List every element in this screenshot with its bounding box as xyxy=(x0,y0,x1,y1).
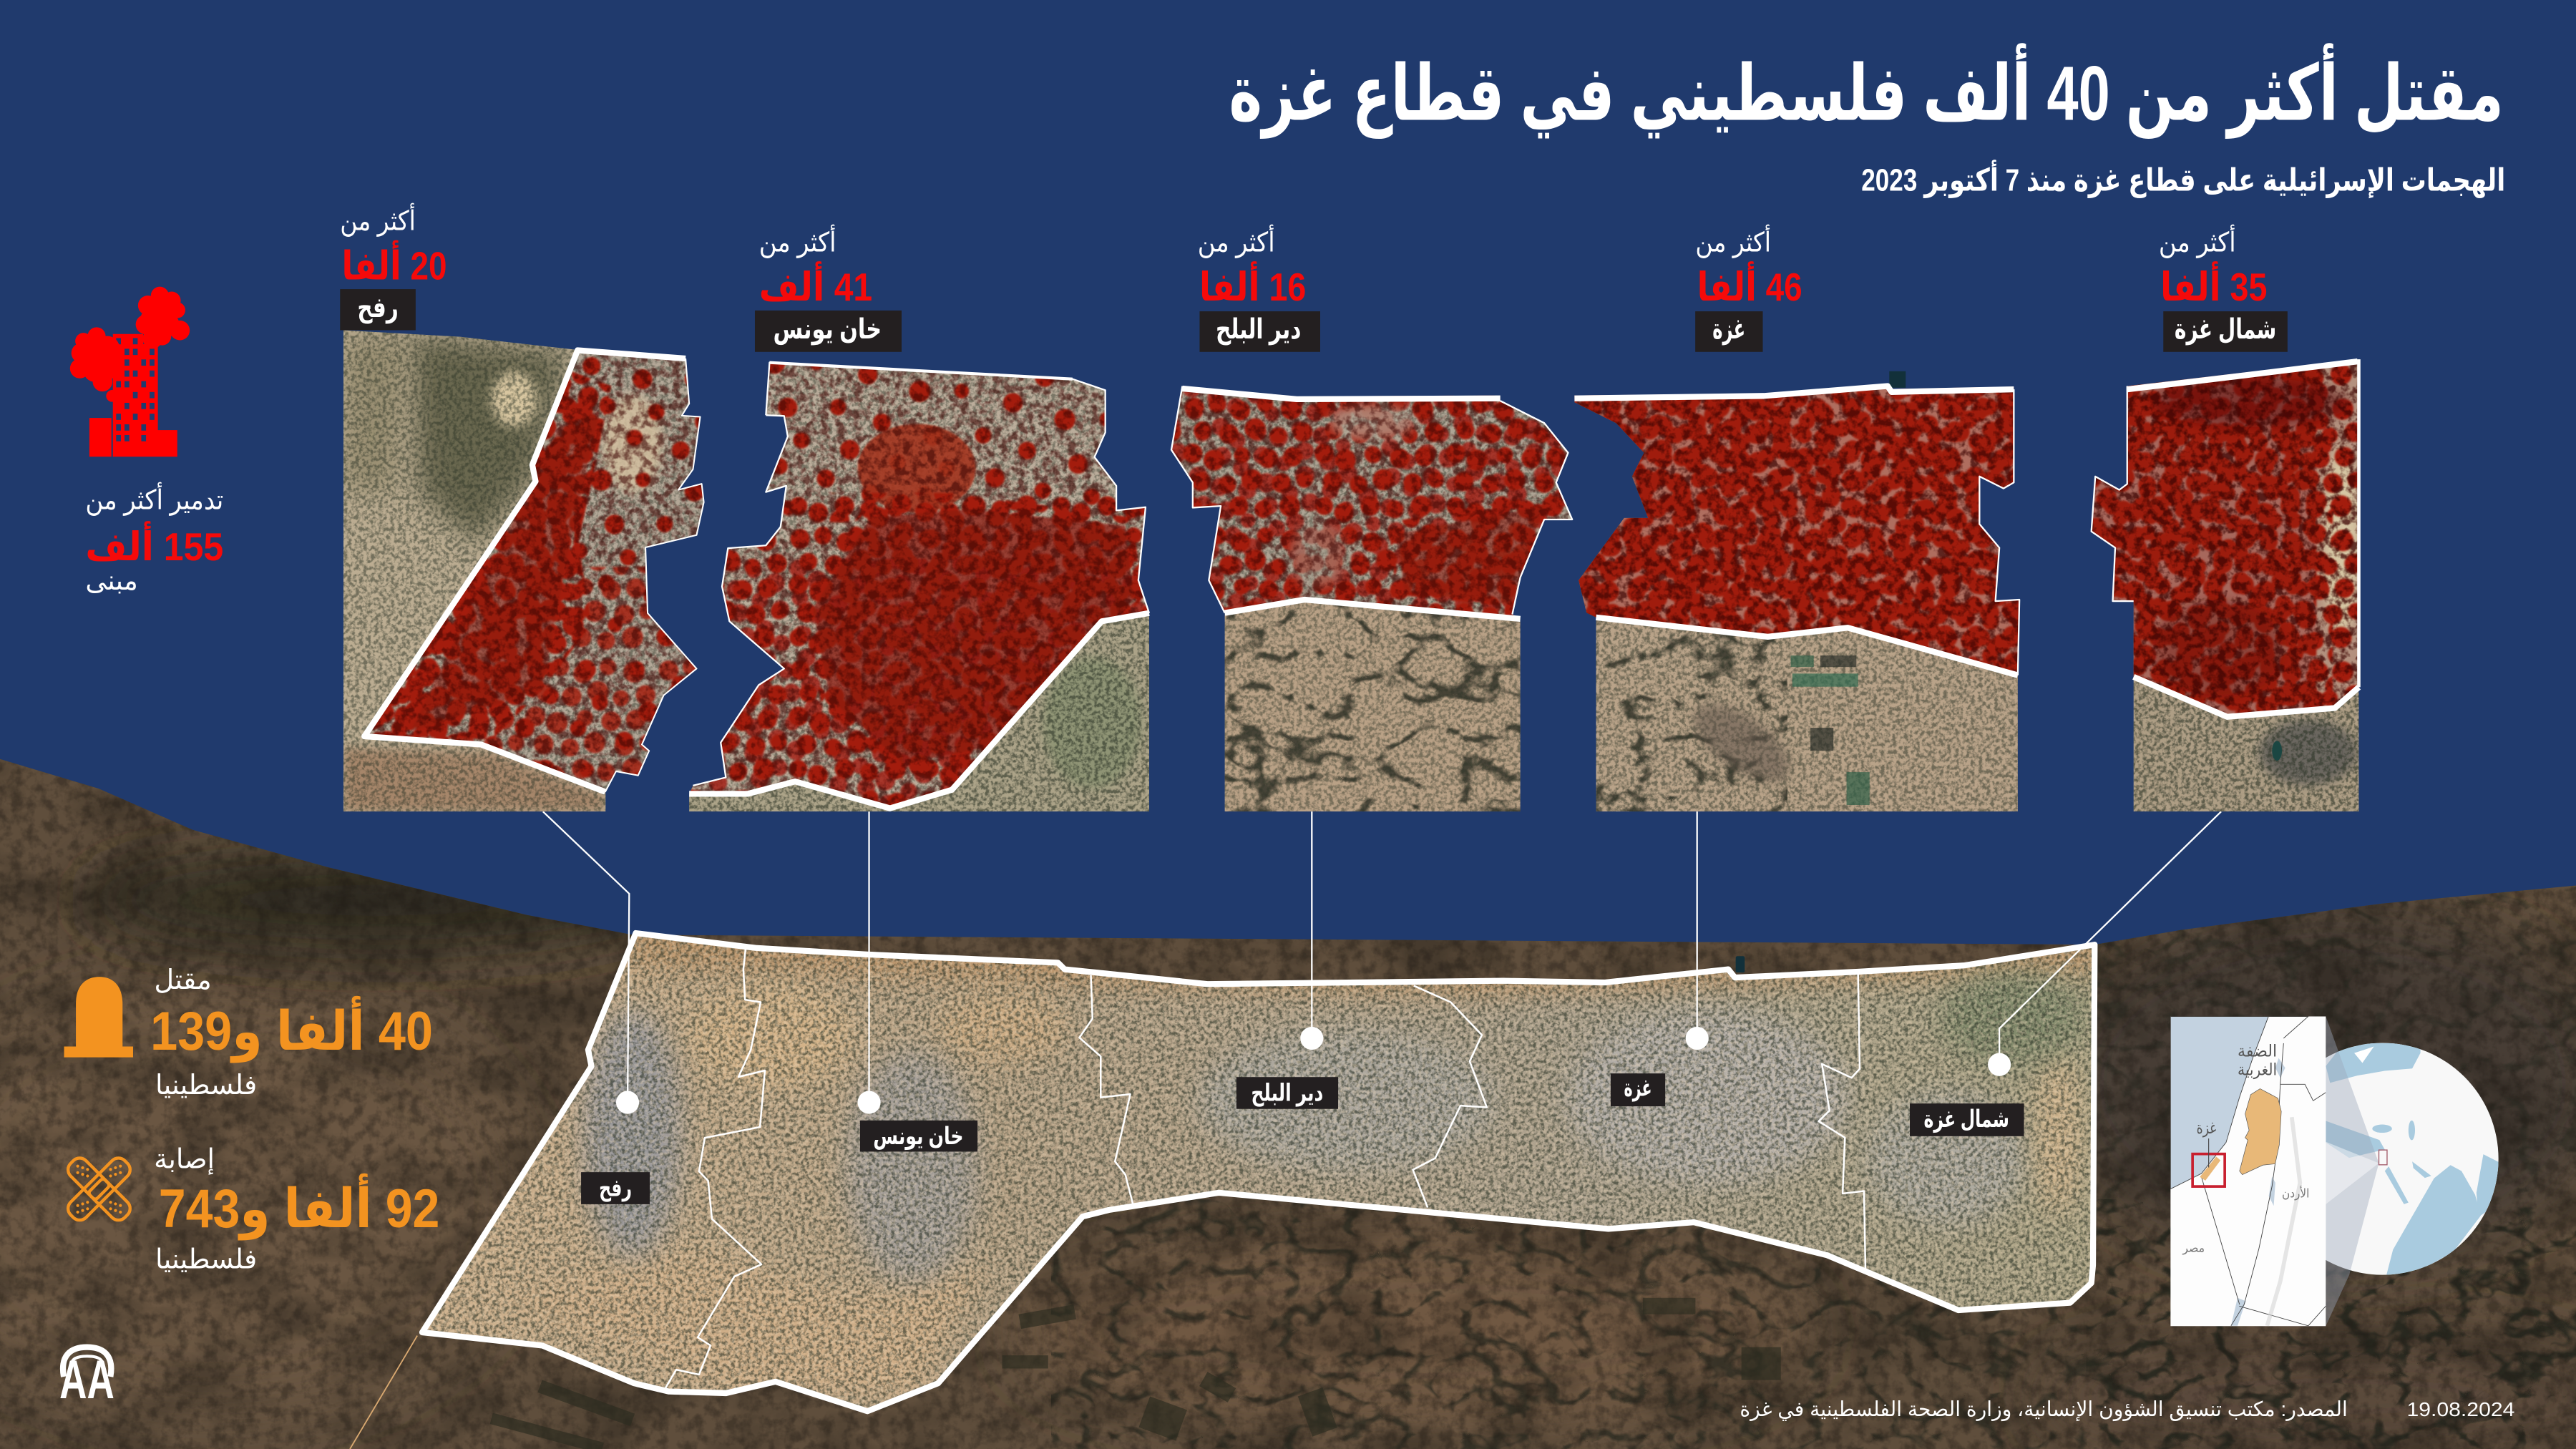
white border xyxy=(1574,386,2019,675)
header: Gaza figures xyxy=(1695,224,1802,352)
governorate boundaries xyxy=(665,946,1865,1388)
stat: destroyed buildings: 155 ألف xyxy=(85,521,223,569)
map label: North Gaza: شمال غزة xyxy=(1924,1106,2009,1133)
label: Gaza: غزة xyxy=(2197,1118,2216,1138)
leader lines xyxy=(543,811,2221,1103)
header: Gaza figures: غزة xyxy=(1712,314,1745,346)
icon: bandage xyxy=(64,1154,134,1224)
header: Rafah figures: 20 ألفا xyxy=(342,240,447,288)
panel: Deir al-Balah damage xyxy=(1166,381,1577,813)
header: North Gaza figures: أكثر من xyxy=(2159,224,2236,258)
map label: Deir al-Balah: دير البلح xyxy=(1251,1080,1323,1107)
location dots xyxy=(616,1027,2011,1114)
stat: destroyed buildings xyxy=(85,482,223,596)
header: Gaza figures: 46 ألفا xyxy=(1697,261,1802,309)
Gaza xyxy=(2200,1156,2220,1181)
label: West Bank: الضفة xyxy=(2238,1041,2277,1060)
stat: killed: 40 ألفا و139 xyxy=(150,996,433,1063)
white border xyxy=(689,363,1149,809)
map label: Gaza xyxy=(1611,1073,1665,1106)
label: Egypt: مصر xyxy=(2182,1240,2205,1254)
farm fields xyxy=(490,1298,1781,1449)
header: Deir al-Balah figures xyxy=(1198,224,1320,352)
panel: Gaza damage xyxy=(1569,371,2024,815)
panel: North Gaza damage xyxy=(2087,355,2363,815)
header: North Gaza figures xyxy=(2159,224,2288,352)
label: West Bank: الغربية xyxy=(2238,1060,2277,1079)
stat: wounded xyxy=(154,1144,439,1274)
label: West Bank xyxy=(2238,1041,2277,1079)
sea xyxy=(2170,1016,2268,1189)
icon: gravestone xyxy=(64,977,133,1058)
header: Khan Younis figures: خان يونس xyxy=(773,314,882,346)
strip outer border xyxy=(422,933,2094,1411)
logo: Anadolu Agency: AA xyxy=(59,1350,114,1410)
white border xyxy=(364,350,704,792)
map label: Rafah xyxy=(581,1172,650,1204)
stat: killed: مقتل xyxy=(154,965,212,995)
harbour tip xyxy=(1889,371,1906,388)
satellite land background xyxy=(0,756,2576,1449)
harbour marker xyxy=(1736,956,1745,972)
header: Khan Younis figures: 41 ألف xyxy=(759,261,872,309)
stat: killed xyxy=(150,965,433,1101)
header: Deir al-Balah figures: دير البلح xyxy=(1216,314,1301,346)
stat: destroyed buildings: تدمير أكثر من xyxy=(85,482,223,517)
label: Jordan: الأردن xyxy=(2282,1185,2309,1200)
white border xyxy=(2092,359,2358,717)
panel: Khan Younis damage xyxy=(682,358,1158,815)
icon: destroyed building xyxy=(70,287,190,457)
white border xyxy=(1171,386,1572,619)
map label: North Gaza xyxy=(1910,1103,2024,1136)
map label: Deir al-Balah xyxy=(1236,1077,1338,1109)
header: Rafah figures: أكثر من xyxy=(340,203,416,237)
header: Khan Younis figures: أكثر من xyxy=(759,224,836,258)
stat: killed: فلسطينيا xyxy=(155,1070,257,1101)
locator globe xyxy=(2266,1016,2502,1326)
West Bank xyxy=(2240,1089,2281,1175)
source: المصدر: مكتب تنسيق الشؤون الإنسانية، وزارة الصحة الفلسطينية في غزة xyxy=(1740,1398,2348,1422)
map label: Khan Younis xyxy=(860,1121,977,1151)
date: 19.08.2024 xyxy=(2407,1398,2514,1420)
stat: wounded: 92 ألفا و743 xyxy=(159,1174,439,1241)
header: Rafah figures xyxy=(340,203,447,330)
header: Deir al-Balah figures: أكثر من xyxy=(1198,224,1275,258)
red focus box xyxy=(2192,1154,2225,1186)
map label: Khan Younis: خان يونس xyxy=(873,1123,964,1151)
borders xyxy=(2202,1016,2326,1326)
stat: wounded: فلسطينيا xyxy=(155,1244,257,1274)
panel: Rafah damage xyxy=(337,321,710,813)
header: North Gaza figures: 35 ألفا xyxy=(2160,261,2267,309)
map: Gaza Strip xyxy=(411,920,2103,1421)
map label: Rafah: رفح xyxy=(599,1175,632,1202)
header: Rafah figures: رفح xyxy=(357,293,399,324)
label: Gaza xyxy=(2197,1118,2216,1167)
header: North Gaza figures: شمال غزة xyxy=(2175,314,2276,346)
map label: Gaza: غزة xyxy=(1624,1075,1652,1102)
locator map panel xyxy=(2170,1016,2326,1326)
logo: Anadolu Agency xyxy=(59,1347,114,1410)
header: Gaza figures: أكثر من xyxy=(1695,224,1771,258)
border line Egypt xyxy=(350,1336,417,1449)
stat: destroyed buildings: مبنى xyxy=(85,566,138,596)
stat: wounded: إصابة xyxy=(154,1144,215,1175)
header: Deir al-Balah figures: 16 ألفا xyxy=(1199,261,1306,309)
header: Khan Younis figures xyxy=(755,224,902,352)
